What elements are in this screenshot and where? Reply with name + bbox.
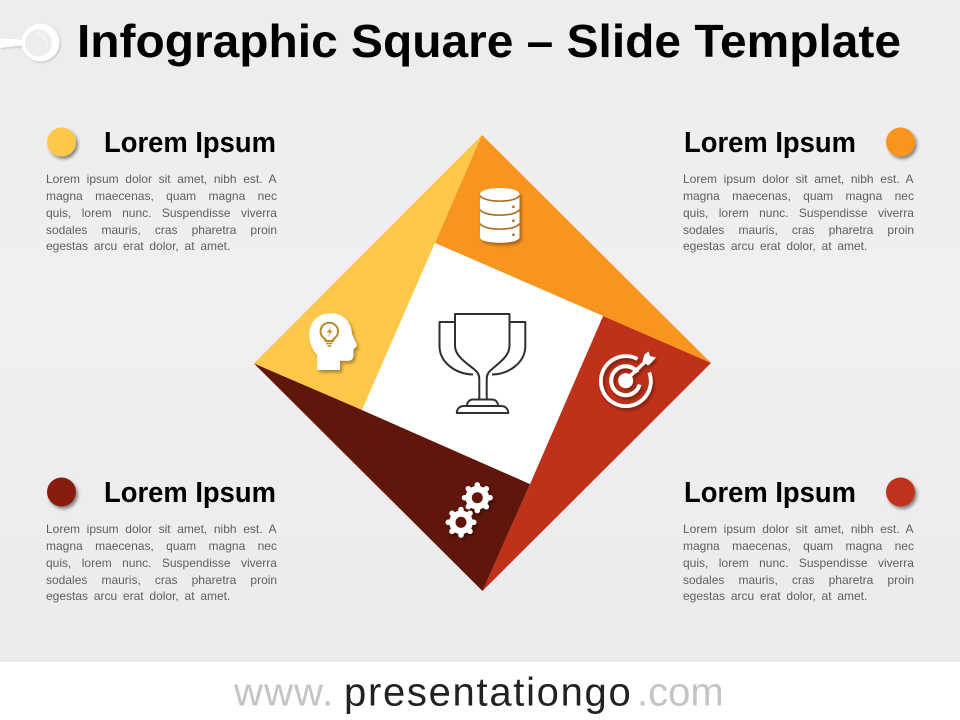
body: bottom-right: Lorem ipsum dolor sit amet, nibh est. A bbox=[683, 522, 914, 536]
body: top-left: egestas arcu erat dolor, at amet. bbox=[46, 239, 230, 253]
heading: top-right: Lorem Ipsum bbox=[684, 127, 856, 159]
body: top-right: egestas arcu erat dolor, at amet. bbox=[683, 239, 867, 253]
icon: target with arrow bbox=[601, 352, 656, 406]
body: top-left: Lorem ipsum dolor sit amet, nibh est. A bbox=[46, 172, 277, 186]
heading: top-left: Lorem Ipsum bbox=[104, 127, 276, 159]
panel: bottom-left text block bbox=[46, 477, 277, 603]
body: bottom-left: egestas arcu erat dolor, at amet. bbox=[46, 589, 230, 603]
logo: magnifier ring bbox=[0, 24, 60, 62]
icon: database bbox=[480, 188, 520, 243]
body: bottom-left: sodales mauris, cras pharetra proin bbox=[46, 573, 277, 587]
body: top-left bbox=[46, 172, 277, 253]
body: bottom-left: Lorem ipsum dolor sit amet, nibh est. A bbox=[46, 522, 277, 536]
gear: upper bbox=[464, 485, 490, 510]
body: top-right: magna maecenas, quam magna nec bbox=[683, 189, 914, 203]
segment: dark brown bbox=[254, 364, 530, 591]
body: top-right: Lorem ipsum dolor sit amet, nibh est. A bbox=[683, 172, 914, 186]
icon: trophy bbox=[440, 314, 525, 413]
body: bottom-right: egestas arcu erat dolor, at amet. bbox=[683, 589, 867, 603]
body: top-right bbox=[683, 172, 914, 253]
footer: website url: presentationgo bbox=[344, 670, 632, 714]
segment: yellow bbox=[254, 135, 482, 410]
title: Infographic Square – Slide Template bbox=[77, 15, 901, 67]
footer band bbox=[0, 662, 960, 720]
footer: website url: .com bbox=[637, 670, 724, 714]
heading: bottom-left: Lorem Ipsum bbox=[104, 477, 276, 509]
icon: head with light bulb bbox=[309, 313, 357, 370]
body: top-left: sodales mauris, cras pharetra proin bbox=[46, 223, 277, 237]
marker: red dot bbox=[886, 478, 915, 506]
panel: top-right text block bbox=[683, 127, 915, 253]
segment: red bbox=[482, 316, 711, 591]
heading: bottom-right: Lorem Ipsum bbox=[684, 477, 856, 509]
body: bottom-right: quis, lorem nunc. Suspendisse viverra bbox=[683, 556, 914, 570]
body: bottom-right: sodales mauris, cras pharetra proin bbox=[683, 573, 914, 587]
body: top-left: quis, lorem nunc. Suspendisse viverra bbox=[46, 206, 277, 220]
segment: orange bbox=[435, 135, 711, 363]
icon: gears bbox=[448, 485, 490, 535]
body: bottom-left bbox=[46, 522, 277, 603]
body: top-right: quis, lorem nunc. Suspendisse viverra bbox=[683, 206, 914, 220]
marker: yellow dot bbox=[47, 128, 76, 156]
panel: top-left text block bbox=[46, 127, 277, 253]
marker: orange dot bbox=[886, 128, 915, 156]
body: bottom-left: quis, lorem nunc. Suspendisse viverra bbox=[46, 556, 277, 570]
body: bottom-right: magna maecenas, quam magna nec bbox=[683, 539, 914, 553]
panel: bottom-right text block bbox=[683, 477, 915, 603]
body: top-left: magna maecenas, quam magna nec bbox=[46, 189, 277, 203]
gear: lower bbox=[448, 510, 474, 535]
diagram: square bbox=[254, 135, 711, 591]
body: bottom-right bbox=[683, 522, 914, 603]
body: bottom-left: magna maecenas, quam magna nec bbox=[46, 539, 277, 553]
body: top-right: sodales mauris, cras pharetra proin bbox=[683, 223, 914, 237]
marker: dark red dot bbox=[47, 478, 76, 506]
center: white square bbox=[362, 243, 603, 484]
footer: website url: www. bbox=[233, 670, 334, 714]
